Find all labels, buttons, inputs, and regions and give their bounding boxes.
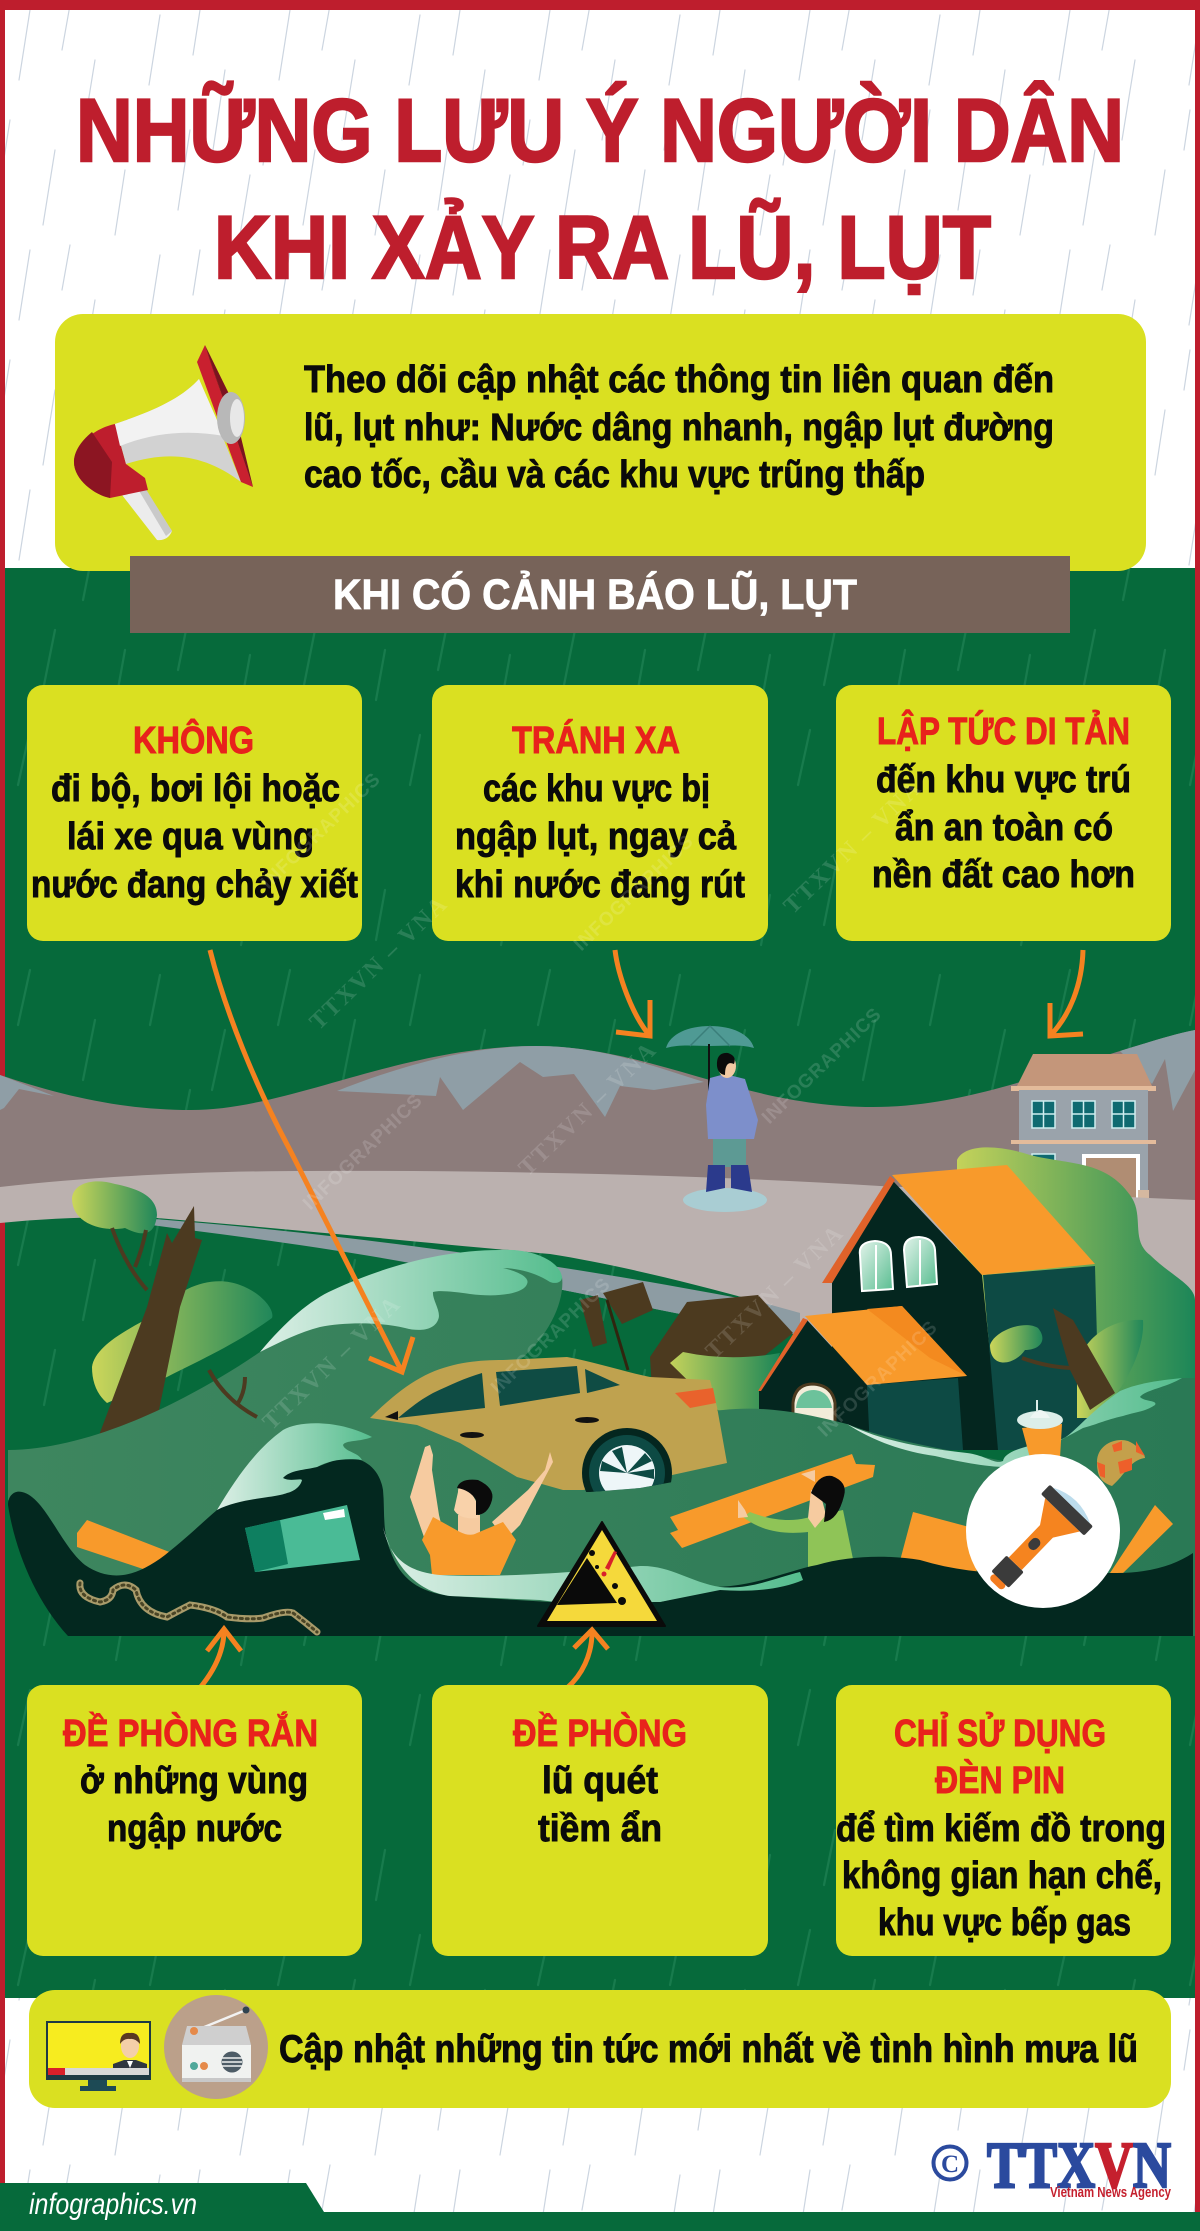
- illustration: flood scene: [0, 1026, 1195, 1636]
- title: [76, 80, 1124, 297]
- panel: latest news: [29, 1990, 1171, 2108]
- panel: evacuate immediately: nền đất cao hơn: [872, 854, 1135, 896]
- panel: watch for snakes: ngập nước: [107, 1808, 282, 1850]
- panel: use flashlights only: ĐÈN PIN: [935, 1758, 1065, 1802]
- panel: watch for flash floods: lũ quét: [542, 1760, 658, 1802]
- sign and collapsed house: [580, 1282, 793, 1415]
- trees behind water left: [72, 1181, 272, 1438]
- panel: stay away: ngập lụt, ngay cả: [455, 816, 737, 858]
- panel: watch for snakes: [27, 1685, 362, 1956]
- icon: rockfall warning sign: [538, 1522, 665, 1626]
- panel: monitoring information: [55, 314, 1146, 571]
- car: [370, 1357, 727, 1492]
- heading bar: flood warning: KHI CÓ CẢNH BÁO LŨ, LỤT: [333, 570, 857, 619]
- panel: do not walk: nước đang chảy xiết: [31, 864, 358, 906]
- icon: flashlight in white circle: [966, 1454, 1120, 1608]
- watermarks: TTXVN – VNA: [305, 891, 453, 1035]
- icon: television: [46, 2021, 151, 2091]
- mountains: [0, 1030, 1195, 1210]
- person with umbrella: [666, 1026, 767, 1212]
- small tree right: [990, 1308, 1143, 1418]
- panel: watch for flash floods: [432, 1685, 768, 1956]
- footer band: infographics.vn: [29, 2188, 197, 2221]
- floating box: [245, 1505, 360, 1572]
- watermarks: TTXVN – VNA: [514, 1037, 662, 1181]
- footer band: [0, 2183, 1200, 2231]
- panel: use flashlights only: không gian hạn chế,: [842, 1855, 1162, 1897]
- arrow: to snake: [199, 1629, 241, 1689]
- panel: use flashlights only: [836, 1685, 1171, 1956]
- panel: do not walk: đi bộ, bơi lội hoặc: [51, 768, 340, 810]
- panel: use flashlights only: khu vực bếp gas: [878, 1902, 1131, 1944]
- watermarks: TTXVN – VNA: [779, 775, 927, 919]
- text: monitoring advice: Theo dõi cập nhật các thông tin liên quan đến: [304, 359, 1054, 401]
- arrow: to car: [210, 950, 413, 1372]
- panel: stay away: [432, 685, 768, 941]
- panel: evacuate immediately: đến khu vực trú: [876, 759, 1131, 801]
- heading bar: flood warning: [130, 556, 1070, 633]
- watermarks: INFOGRAPHICS: [257, 769, 385, 893]
- icon: floating cup: [1017, 1400, 1063, 1458]
- main flood wave: [8, 1250, 1195, 1636]
- watermarks: INFOGRAPHICS: [299, 1090, 427, 1214]
- person holding plank: [670, 1454, 875, 1575]
- water ribbon: [383, 1527, 803, 1603]
- watermarks: [257, 769, 942, 1441]
- panel: evacuate immediately: [836, 685, 1171, 941]
- panel: watch for snakes: ở những vùng: [80, 1760, 308, 1802]
- right wave ribbon: [847, 1378, 1182, 1467]
- icon: snake: [80, 1583, 317, 1632]
- panel: stay away: TRÁNH XA: [512, 718, 680, 762]
- panel: use flashlights only: CHỈ SỬ DỤNG: [894, 1711, 1106, 1755]
- logo: TTXVN: TTXVN: [987, 2129, 1171, 2202]
- watermarks: TTXVN – VNA: [701, 1220, 849, 1364]
- wave crest: [260, 1250, 562, 1352]
- text: monitoring advice: cao tốc, cầu và các khu vực trũng thấp: [304, 454, 925, 496]
- logo: TTXVN: C: [941, 2151, 959, 2178]
- arrow: to house: [1050, 950, 1083, 1036]
- panel: stay away: khi nước đang rút: [455, 864, 745, 906]
- panel: evacuate immediately: LẬP TỨC DI TẢN: [877, 709, 1130, 753]
- icon: megaphone: [74, 345, 253, 540]
- bush behind house: [957, 1147, 1195, 1440]
- panel: watch for snakes: ĐỀ PHÒNG RẮN: [63, 1711, 318, 1755]
- title: KHI XẢY RA LŨ, LỤT: [214, 197, 991, 297]
- planks behind: [77, 1505, 1173, 1576]
- watermarks: INFOGRAPHICS: [487, 1274, 615, 1398]
- text: monitoring advice: lũ, lụt như: Nước dâng nhanh, ngập lụt đường: [304, 407, 1054, 449]
- arrow: to person: [615, 950, 650, 1036]
- dark water foreground: [8, 1458, 1193, 1636]
- panel: watch for flash floods: tiềm ẩn: [538, 1808, 662, 1850]
- panel: use flashlights only: để tìm kiếm đồ trong: [836, 1808, 1166, 1850]
- panel: watch for flash floods: ĐỀ PHÒNG: [513, 1711, 687, 1755]
- watermarks: INFOGRAPHICS: [570, 831, 698, 955]
- road: [0, 1171, 1195, 1420]
- broken branch: [209, 1370, 257, 1417]
- man in the water: [410, 1445, 553, 1575]
- arrow: to warning sign: [567, 1630, 608, 1688]
- panel: do not walk: [27, 685, 362, 941]
- panel: evacuate immediately: ẩn an toàn có: [895, 807, 1113, 849]
- watermarks: INFOGRAPHICS: [758, 1004, 886, 1128]
- watermarks: INFOGRAPHICS: [814, 1317, 942, 1441]
- big house: [822, 1165, 1100, 1450]
- small house: [758, 1306, 967, 1450]
- panel: do not walk: lái xe qua vùng: [67, 816, 314, 858]
- green section background with rain: [5, 568, 1195, 1998]
- panel: stay away: các khu vực bị: [483, 768, 710, 810]
- text: monitoring advice: [304, 359, 1054, 496]
- icon: floating ball: [1097, 1440, 1145, 1486]
- watermarks: TTXVN – VNA: [258, 1291, 406, 1435]
- foreground wave crest: [217, 1423, 372, 1510]
- panel: do not walk: KHÔNG: [133, 717, 254, 762]
- icon: radio: [164, 1995, 268, 2099]
- distant house: [1011, 1054, 1156, 1202]
